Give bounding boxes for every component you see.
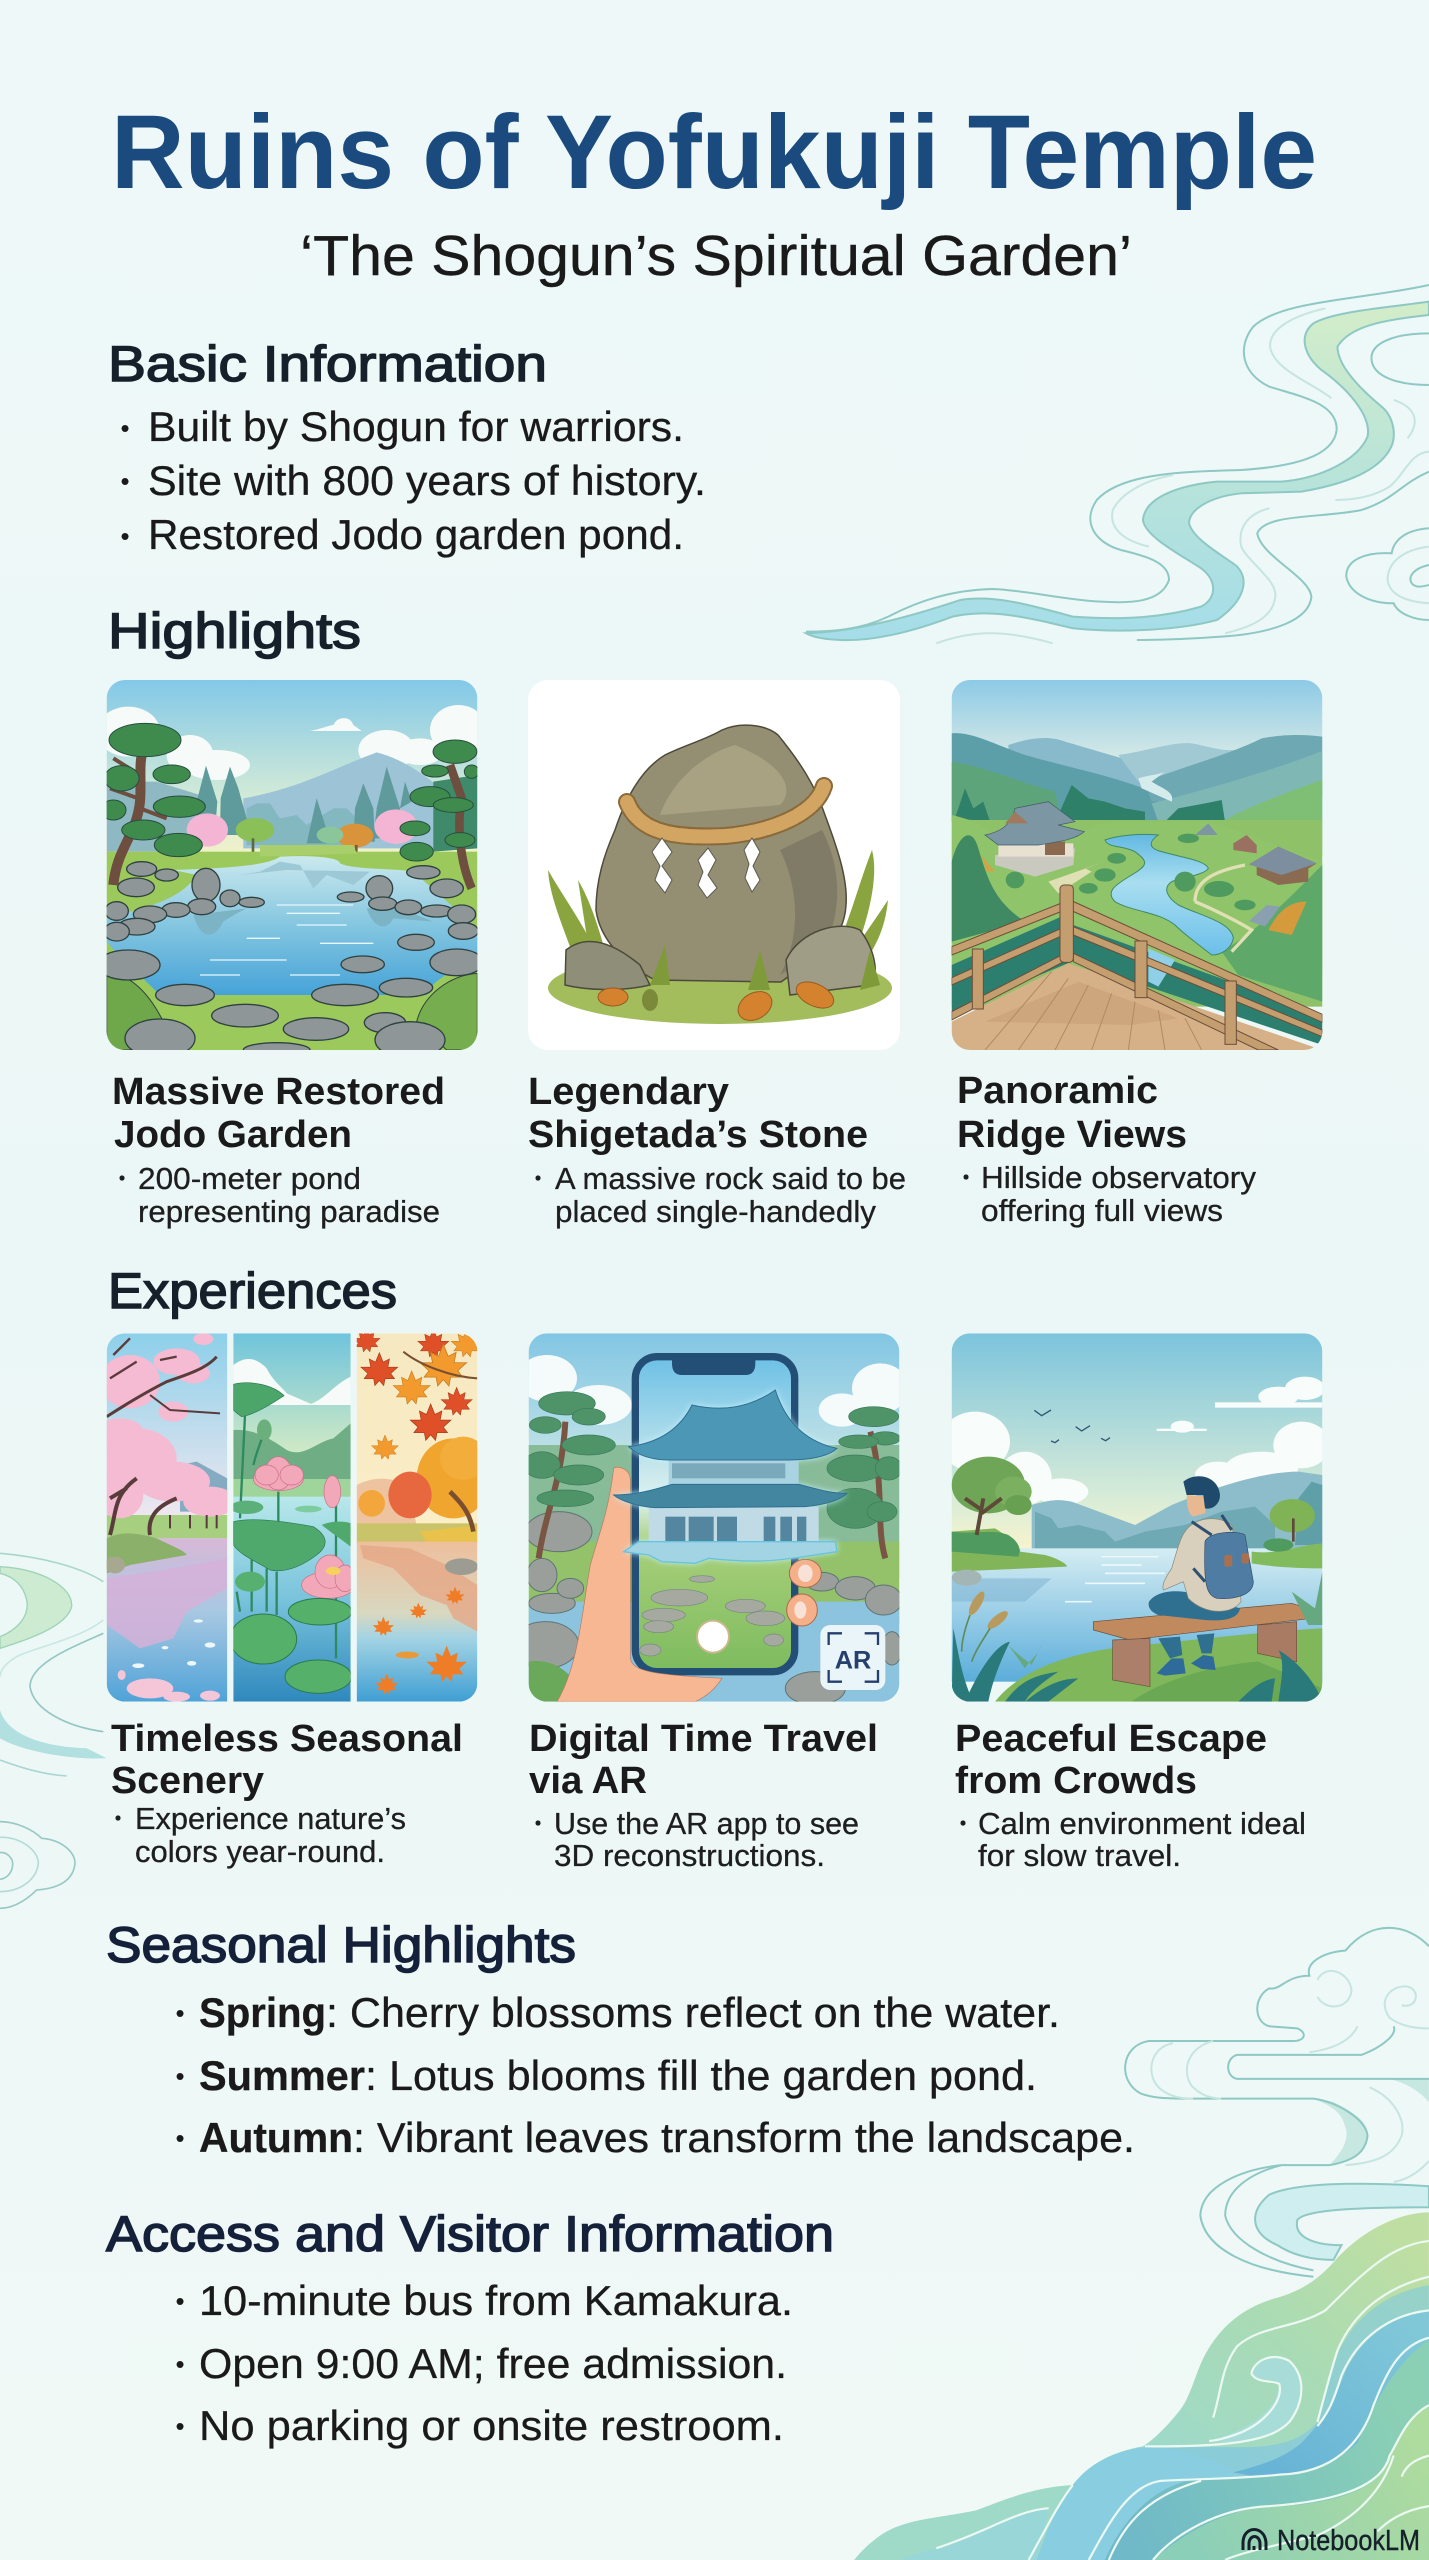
list: basic information bullets: Built by Shogun for warriors. <box>148 403 684 450</box>
card description <box>115 1801 406 1869</box>
card description: offering full views <box>981 1193 1223 1228</box>
card description: 3D reconstructions. <box>554 1838 825 1873</box>
illustration: Shigetada's stone <box>528 680 900 1050</box>
list: basic information bullets: • <box>120 413 130 443</box>
list: basic information bullets: • <box>120 466 130 496</box>
card title <box>529 1718 878 1802</box>
heading: highlights: Highlights <box>108 603 361 659</box>
list: access bullets: 10-minute bus from Kamakura. <box>199 2277 793 2324</box>
decoration: lower right cloud and waves <box>854 1928 1429 2560</box>
card title: Peaceful Escape <box>955 1718 1267 1760</box>
card title <box>111 1718 463 1802</box>
card description: Use the AR app to see <box>554 1806 859 1841</box>
list: basic information bullets <box>120 403 706 558</box>
card description: • <box>535 1168 541 1188</box>
list item: autumn: • <box>175 2123 185 2153</box>
list: access bullets: • <box>175 2349 185 2379</box>
card description: for slow travel. <box>978 1838 1181 1873</box>
decoration: left swirl and cloud <box>0 1553 107 1908</box>
card description: • <box>960 1813 966 1833</box>
panel: Shigetada's stone card <box>528 680 906 1229</box>
card title: Ridge Views <box>957 1114 1187 1156</box>
card description <box>960 1806 1306 1873</box>
panel: peaceful escape card <box>940 1333 1330 1873</box>
illustration: phone showing AR temple: AR <box>835 1646 871 1674</box>
card title: Digital Time Travel <box>529 1718 878 1760</box>
list: access bullets: • <box>175 2411 185 2441</box>
card description: representing paradise <box>138 1194 440 1229</box>
card description: • <box>963 1167 969 1187</box>
icon: NotebookLM logo <box>1243 2530 1266 2550</box>
card title: Timeless Seasonal <box>111 1718 463 1760</box>
heading: seasonal highlights: Seasonal Highlights <box>106 1917 576 1973</box>
list: basic information bullets: Site with 800 years of history. <box>148 457 706 504</box>
card description: • <box>115 1808 121 1828</box>
illustration: ridge view from deck <box>952 680 1322 1050</box>
card description <box>535 1806 859 1873</box>
card title: Panoramic <box>957 1070 1158 1112</box>
card description: • <box>119 1168 125 1188</box>
panel: seasonal scenery card <box>97 1328 490 1869</box>
panel: panoramic views card <box>952 680 1322 1228</box>
panel: Jodo garden card <box>97 680 487 1229</box>
title: Ruins of Yofukuji Temple <box>111 94 1317 211</box>
card title: from Crowds <box>955 1760 1197 1802</box>
card title <box>955 1718 1267 1802</box>
panel: access and visitor information <box>106 2206 834 2449</box>
card description <box>535 1161 906 1229</box>
card description: 200-meter pond <box>138 1161 361 1196</box>
card title: Scenery <box>111 1760 264 1802</box>
list item: summer: • <box>175 2061 185 2091</box>
illustration: traveller on bench by lake <box>940 1333 1330 1702</box>
card title <box>112 1071 445 1156</box>
list: access bullets: Open 9:00 AM; free admission. <box>199 2340 787 2387</box>
card description: Hillside observatory <box>981 1160 1257 1195</box>
card title: Legendary <box>528 1071 729 1113</box>
decoration: upper right swirl <box>806 285 1429 643</box>
panel: seasonal highlights <box>106 1917 1135 2161</box>
illustration: three season panels <box>97 1328 490 1702</box>
card description: placed single-handedly <box>555 1194 876 1229</box>
list: basic information bullets: • <box>120 521 130 551</box>
list: access bullets: No parking or onsite restroom. <box>199 2402 784 2449</box>
card description: • <box>535 1813 541 1833</box>
list: access bullets: • <box>175 2286 185 2316</box>
card description: Experience nature’s <box>135 1801 406 1836</box>
heading: access and visitor information: Access and Visitor Information <box>106 2206 834 2262</box>
list: basic information bullets: Restored Jodo garden pond. <box>148 511 684 558</box>
subtitle: ‘The Shogun’s Spiritual Garden’ <box>300 224 1132 288</box>
illustration: Jodo garden pond <box>97 680 487 1058</box>
card title: Jodo Garden <box>114 1114 352 1156</box>
list item: autumn: Autumn <box>199 2114 353 2161</box>
list item: spring: : Cherry blossoms reflect on the water. <box>326 1989 1060 2036</box>
card title: Massive Restored <box>112 1071 445 1113</box>
card description: Calm environment ideal <box>978 1806 1306 1841</box>
illustration: phone showing AR temple <box>512 1333 909 1705</box>
list item: spring: Spring <box>199 1989 326 2036</box>
card description <box>963 1160 1257 1228</box>
card title <box>957 1070 1187 1156</box>
card title: via AR <box>529 1760 647 1802</box>
list: access bullets <box>175 2277 793 2449</box>
heading: basic information: Basic Information <box>108 336 547 392</box>
panel: basic information <box>108 336 706 558</box>
list item: autumn: : Vibrant leaves transform the landscape. <box>353 2114 1135 2161</box>
card description <box>119 1161 440 1229</box>
list item: summer: Summer <box>199 2052 365 2099</box>
panel: AR time travel card <box>512 1333 909 1873</box>
list item: summer: : Lotus blooms fill the garden pond. <box>365 2052 1037 2099</box>
card description: A massive rock said to be <box>555 1161 906 1196</box>
card description: colors year-round. <box>135 1834 385 1869</box>
list item: spring: • <box>175 1998 185 2028</box>
card title <box>528 1071 868 1156</box>
heading: experiences: Experiences <box>108 1263 397 1319</box>
card title: Shigetada’s Stone <box>528 1114 868 1156</box>
